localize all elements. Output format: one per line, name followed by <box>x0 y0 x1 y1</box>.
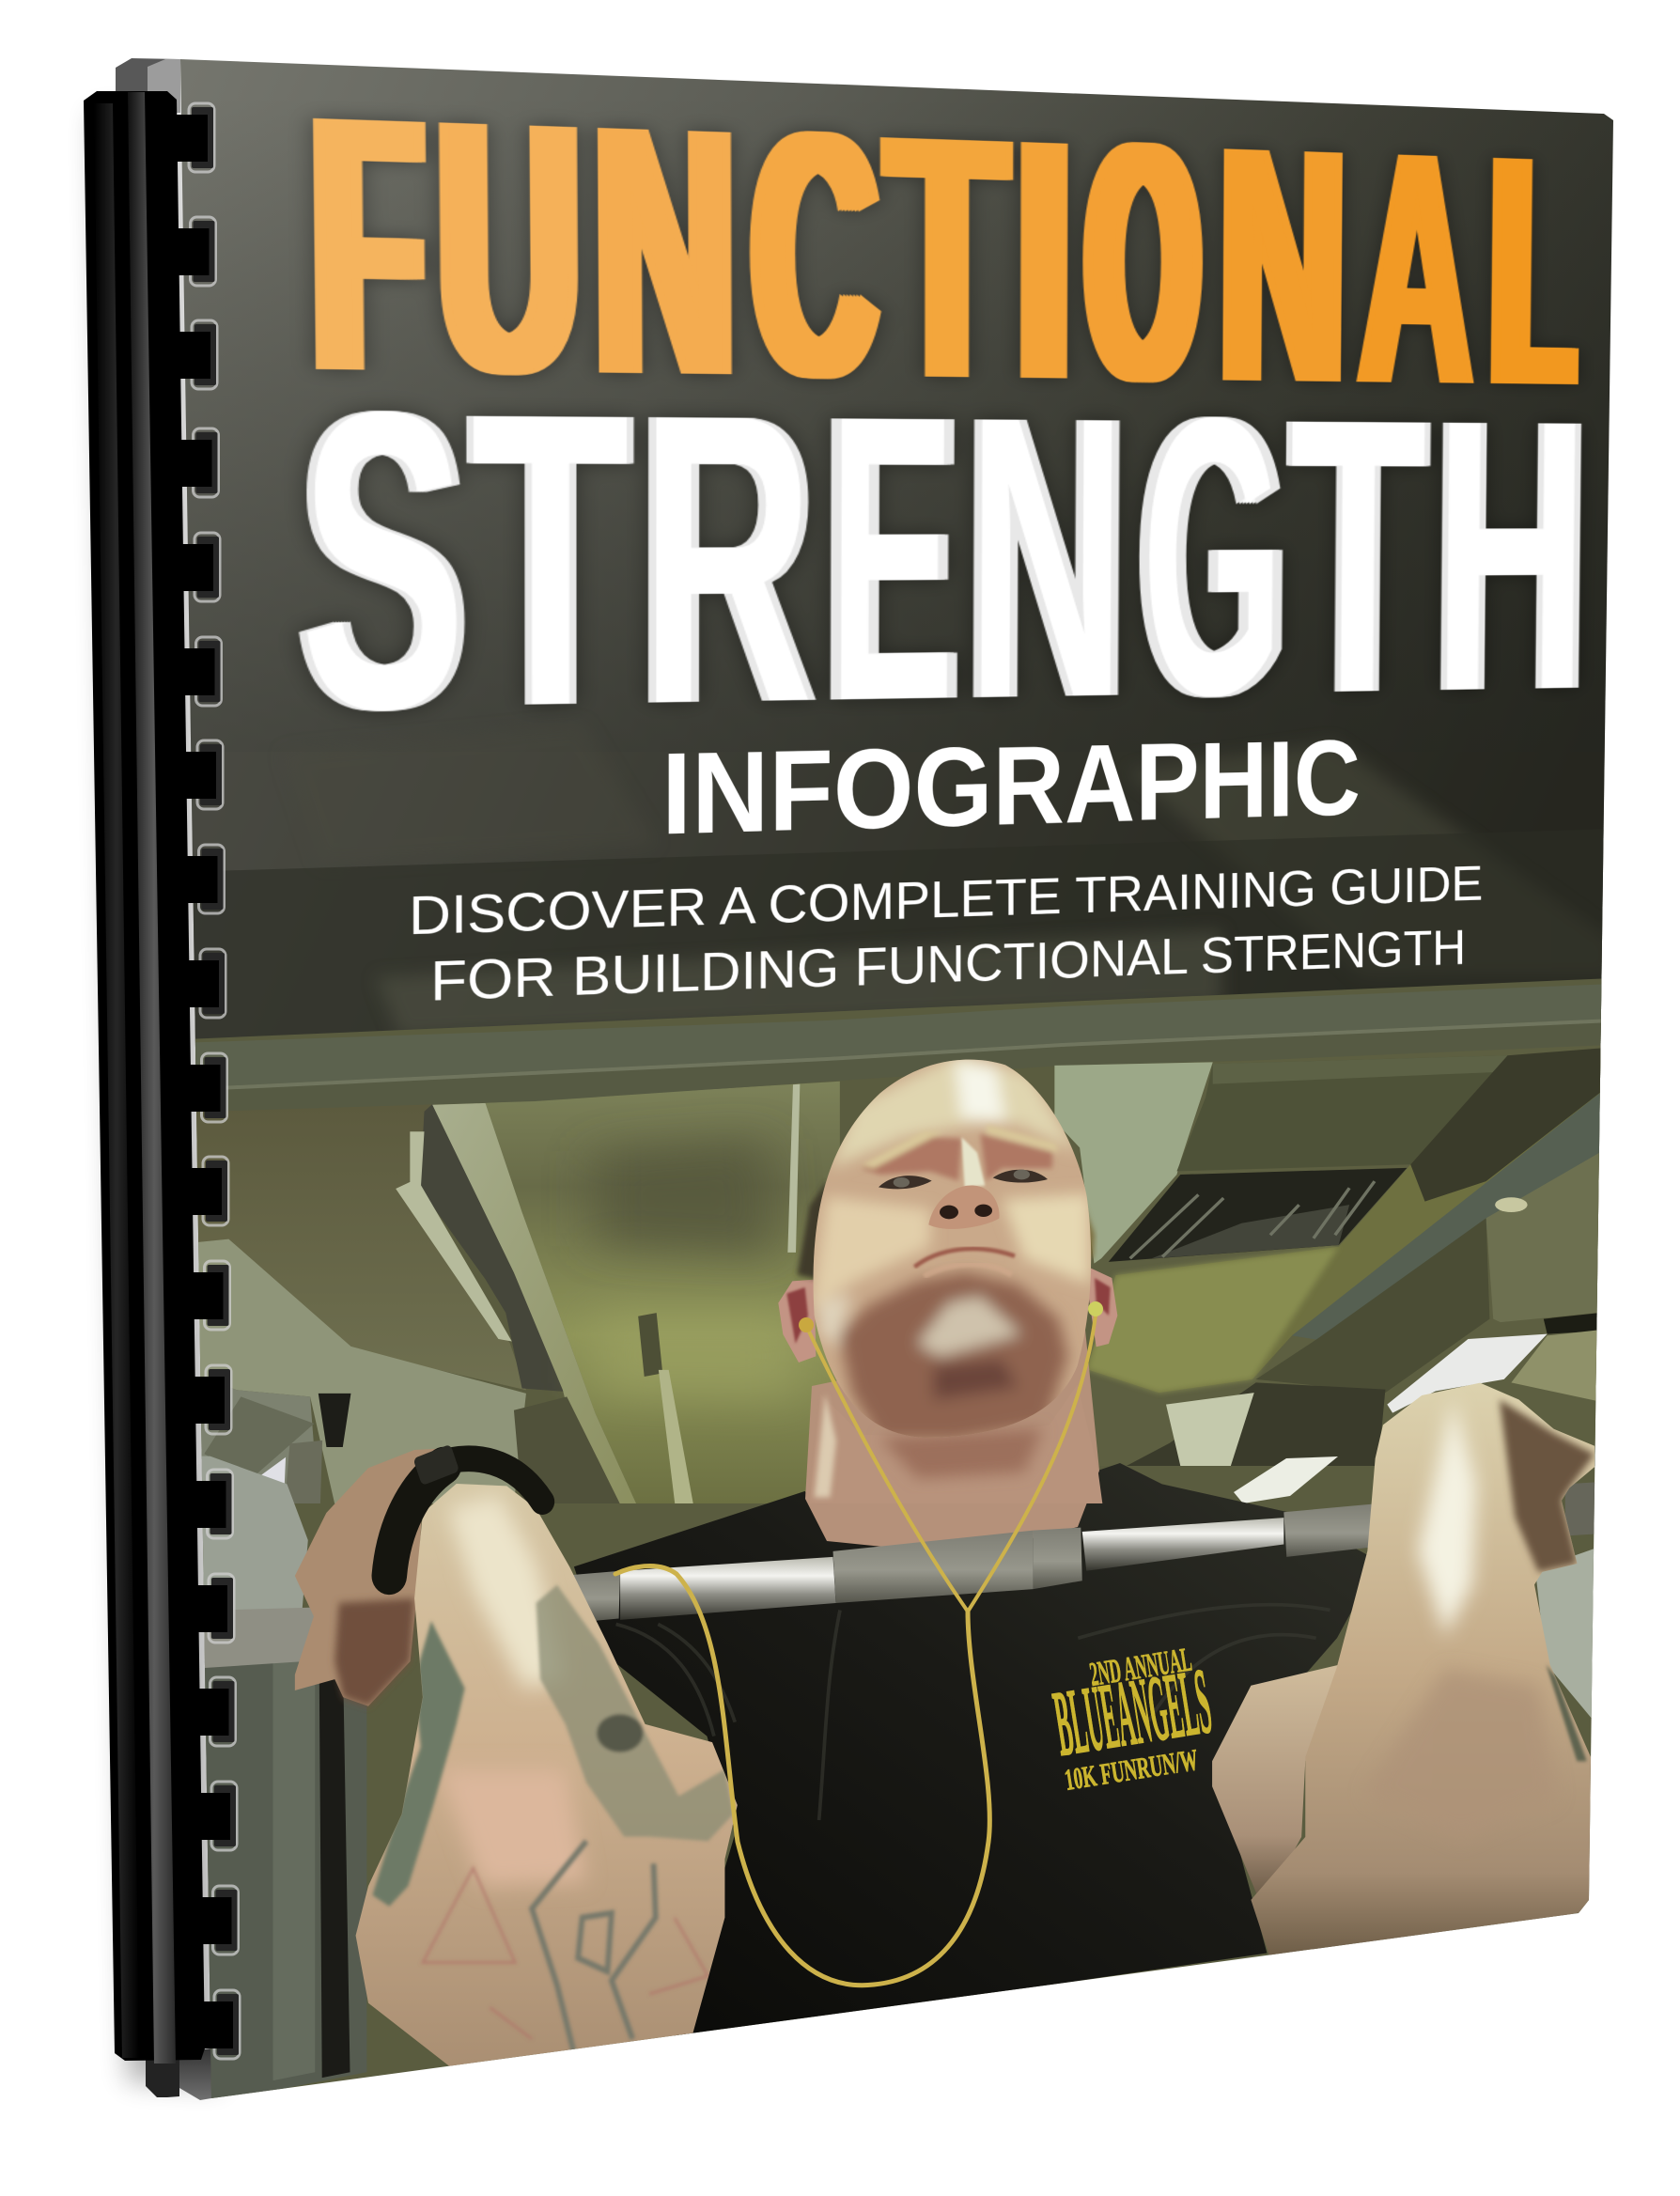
title: FUNCTIONAL: A <box>1358 82 1475 454</box>
head and face <box>778 1052 1117 1503</box>
left arm <box>295 1444 738 2075</box>
title: FUNCTIONAL: F <box>312 39 423 448</box>
forearm <box>356 1484 738 2075</box>
title: STRENGTH: S <box>299 323 466 800</box>
subtitle: INFOGRAPHIC: INFOGRAPHIC <box>661 718 1361 860</box>
shirt logo text: 2ND ANNUAL <box>1087 1640 1194 1693</box>
title: FUNCTIONAL: C <box>753 57 877 450</box>
right arm <box>1212 1383 1594 1959</box>
title: STRENGTH: H <box>1432 339 1591 773</box>
binder spine <box>84 91 205 2064</box>
title: FUNCTIONAL: L <box>1491 87 1576 454</box>
eyes <box>879 1176 932 1189</box>
forearm and hand <box>1251 1383 1594 1959</box>
earphone wire <box>615 1316 1096 1986</box>
ceiling right <box>1054 1044 1637 1466</box>
skull <box>814 1060 1091 1438</box>
ceiling left and centre <box>163 1082 840 1503</box>
neck upper <box>810 1384 1102 1503</box>
text band <box>179 829 1613 1043</box>
title: STRENGTH: N <box>966 333 1128 785</box>
mouth <box>914 1249 1015 1267</box>
tattoos <box>372 1585 733 2052</box>
dark title panel <box>141 47 1635 1081</box>
air vent <box>1109 1168 1407 1262</box>
tagline line 1: DISCOVER A COMPLETE TRAINING GUIDE <box>409 856 1483 946</box>
face shading <box>811 1052 1090 1441</box>
neck <box>805 1330 1099 1555</box>
black t-shirt <box>574 1463 1379 2044</box>
left hand <box>295 1448 457 1706</box>
wristwatch <box>389 1458 542 1576</box>
photo base <box>141 977 1635 2124</box>
title: FUNCTIONAL: U <box>437 45 582 449</box>
back cover tabs at top <box>116 58 180 113</box>
right gym background <box>1535 1541 1616 1748</box>
title: FUNCTIONAL <box>303 39 1579 454</box>
olive ducting <box>1089 1067 1601 1393</box>
title: STRENGTH: G <box>1141 335 1285 780</box>
title: FUNCTIONAL: N <box>593 51 736 450</box>
shirt logo text <box>1048 1640 1217 1797</box>
hair sides <box>797 1181 827 1281</box>
cover panel: BLUEANGELS <box>1048 1648 1217 1776</box>
binding teeth <box>165 103 240 2059</box>
nose <box>961 1137 985 1187</box>
left gym machine lower <box>154 1456 366 2114</box>
barbell <box>168 1481 1610 1671</box>
earbud <box>799 1317 814 1332</box>
duct box <box>1176 1066 1492 1171</box>
binder drop shadow <box>94 113 221 2086</box>
title: STRENGTH: R <box>640 328 814 792</box>
gym machine at top left <box>200 1394 350 1503</box>
title: STRENGTH <box>296 323 1591 800</box>
bicep <box>1212 1664 1340 1908</box>
title: FUNCTIONAL: O <box>1087 71 1199 452</box>
tagline line 2: FOR BUILDING FUNCTIONAL STRENGTH <box>430 920 1466 1012</box>
pillar <box>1166 1393 1254 1466</box>
pipes <box>179 984 1613 1113</box>
title: FUNCTIONAL: I <box>1000 68 1088 452</box>
title: STRENGTH: T <box>470 326 630 796</box>
ceiling light centre <box>1234 1456 1338 1503</box>
ears <box>778 1280 816 1363</box>
back cover tabs at bottom <box>146 2048 211 2100</box>
ceiling light right <box>1387 1334 1548 1413</box>
title: STRENGTH: E <box>829 331 956 787</box>
bright column <box>1054 1062 1213 1264</box>
title: FUNCTIONAL: T <box>886 63 1008 451</box>
ghost ceiling behind band <box>376 930 1221 1036</box>
title: STRENGTH: T <box>1287 337 1428 777</box>
title: FUNCTIONAL: N <box>1218 76 1346 453</box>
shirt logo text: 10K FUNRUN/W <box>1062 1742 1200 1797</box>
